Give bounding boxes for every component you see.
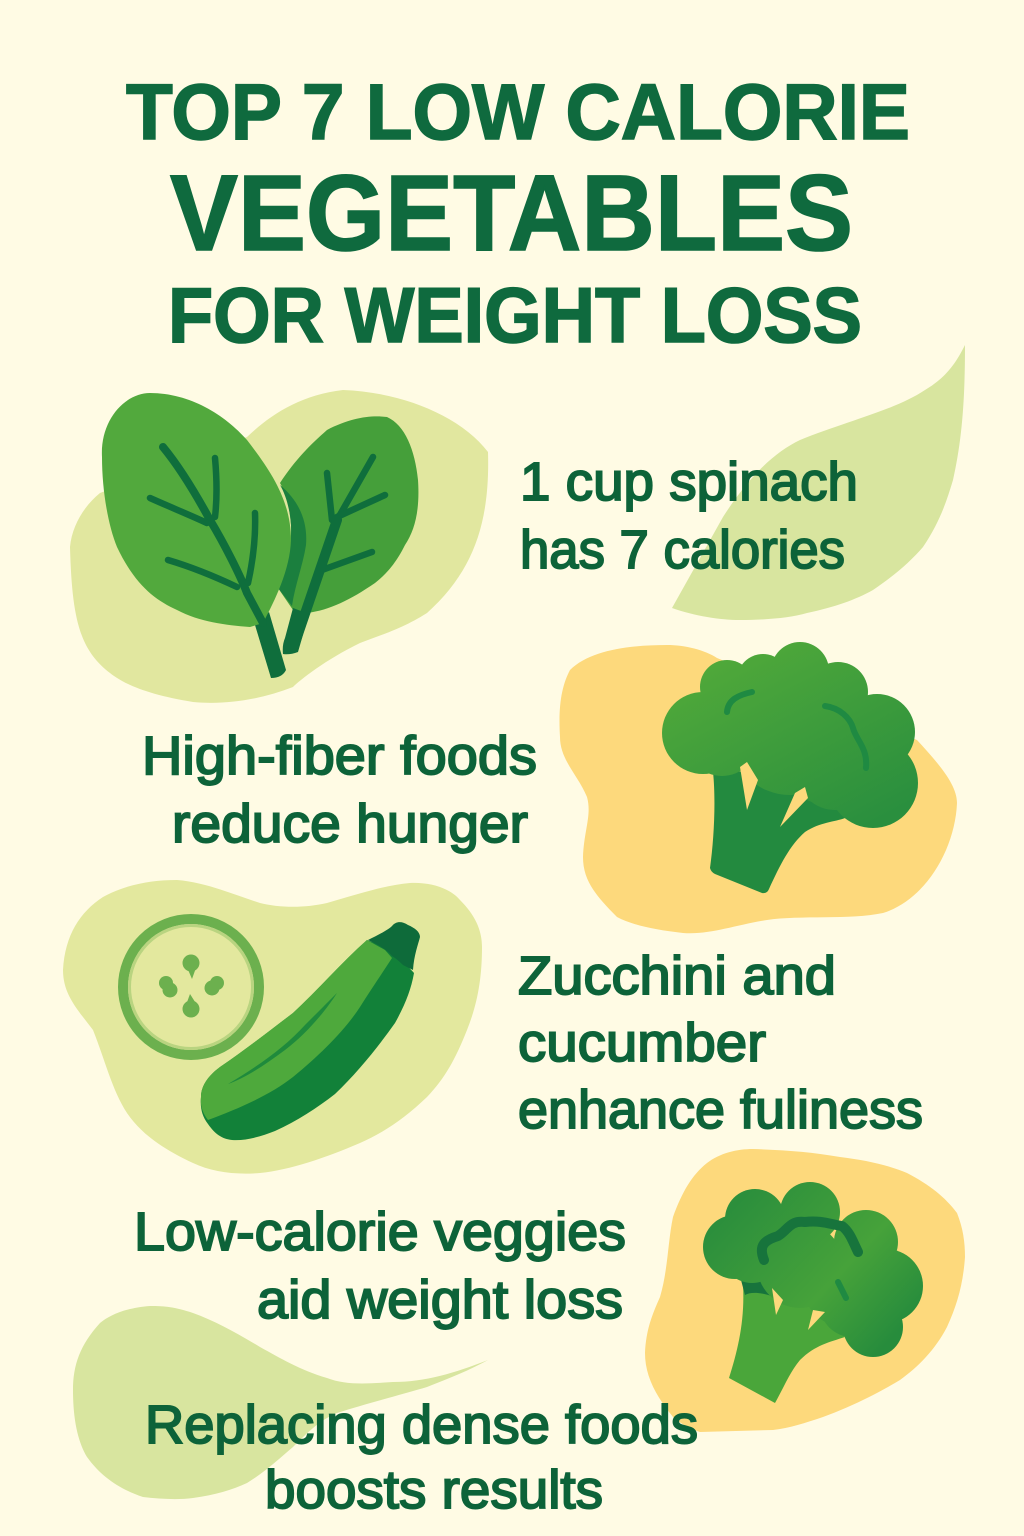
stalk gaps [772,1288,825,1330]
stalk shadow [741,1280,773,1296]
floret detail marks [762,1221,858,1260]
right leaf shadow [278,485,306,606]
stalk gaps [740,762,808,827]
text: fiber fact: reduce hunger [172,794,528,854]
broccoli florets [662,642,918,828]
backdrop blob [63,880,482,1174]
text: fiber fact [142,726,537,854]
zucchini cap [368,922,420,970]
yellow backdrop blob [559,645,957,933]
broccoli florets [703,1182,923,1357]
decorative leaf: top right [672,345,965,620]
title line 3: FOR WEIGHT LOSS [168,271,862,359]
cucumber seeds [159,954,224,1018]
text: zucchini fact: enhance fuliness [518,1080,923,1140]
text: fiber fact: High-fiber foods [142,726,537,786]
cucumber slice inner ring [130,926,252,1048]
zucchini vein [228,993,337,1084]
spinach backdrop blob [70,390,488,703]
title line 1: TOP 7 LOW CALORIE [126,67,910,156]
floret detail marks [727,692,866,768]
cucumber slice rind [123,919,259,1055]
yellow backdrop blob [645,1149,965,1432]
illustration: spinach [70,390,488,703]
text: low-calorie fact: Low-calorie veggies [134,1202,626,1262]
text: replacing fact [145,1395,698,1520]
right leaf veins [296,457,385,640]
left spinach leaf [102,393,291,627]
decorative leaf: bottom left [73,1306,488,1499]
title [126,67,910,359]
zucchini highlight [201,940,392,1120]
text: replacing fact: Replacing dense foods [145,1395,698,1455]
text: spinach fact: 1 cup spinach [520,452,858,512]
text: zucchini fact: cucumber [518,1013,766,1073]
right stem [283,608,309,654]
right spinach leaf [278,416,418,613]
text: zucchini fact: Zucchini and [518,946,836,1006]
left stem [255,612,286,678]
text: low-calorie fact: aid weight loss [257,1270,623,1330]
text: zucchini fact [518,946,923,1140]
title line 2: VEGETABLES [170,152,853,273]
illustration: broccoli two [645,1149,965,1432]
illustration: zucchini and cucumber [63,880,482,1174]
broccoli stalk [710,770,845,893]
left leaf veins [150,447,263,623]
illustration: broccoli one [559,642,957,933]
text: replacing fact: boosts results [265,1460,603,1520]
broccoli stalk [729,1285,845,1403]
text: spinach fact: has 7 calories [520,520,845,580]
text: spinach fact [520,452,858,580]
text: low-calorie fact [134,1202,626,1330]
zucchini body [201,940,414,1140]
